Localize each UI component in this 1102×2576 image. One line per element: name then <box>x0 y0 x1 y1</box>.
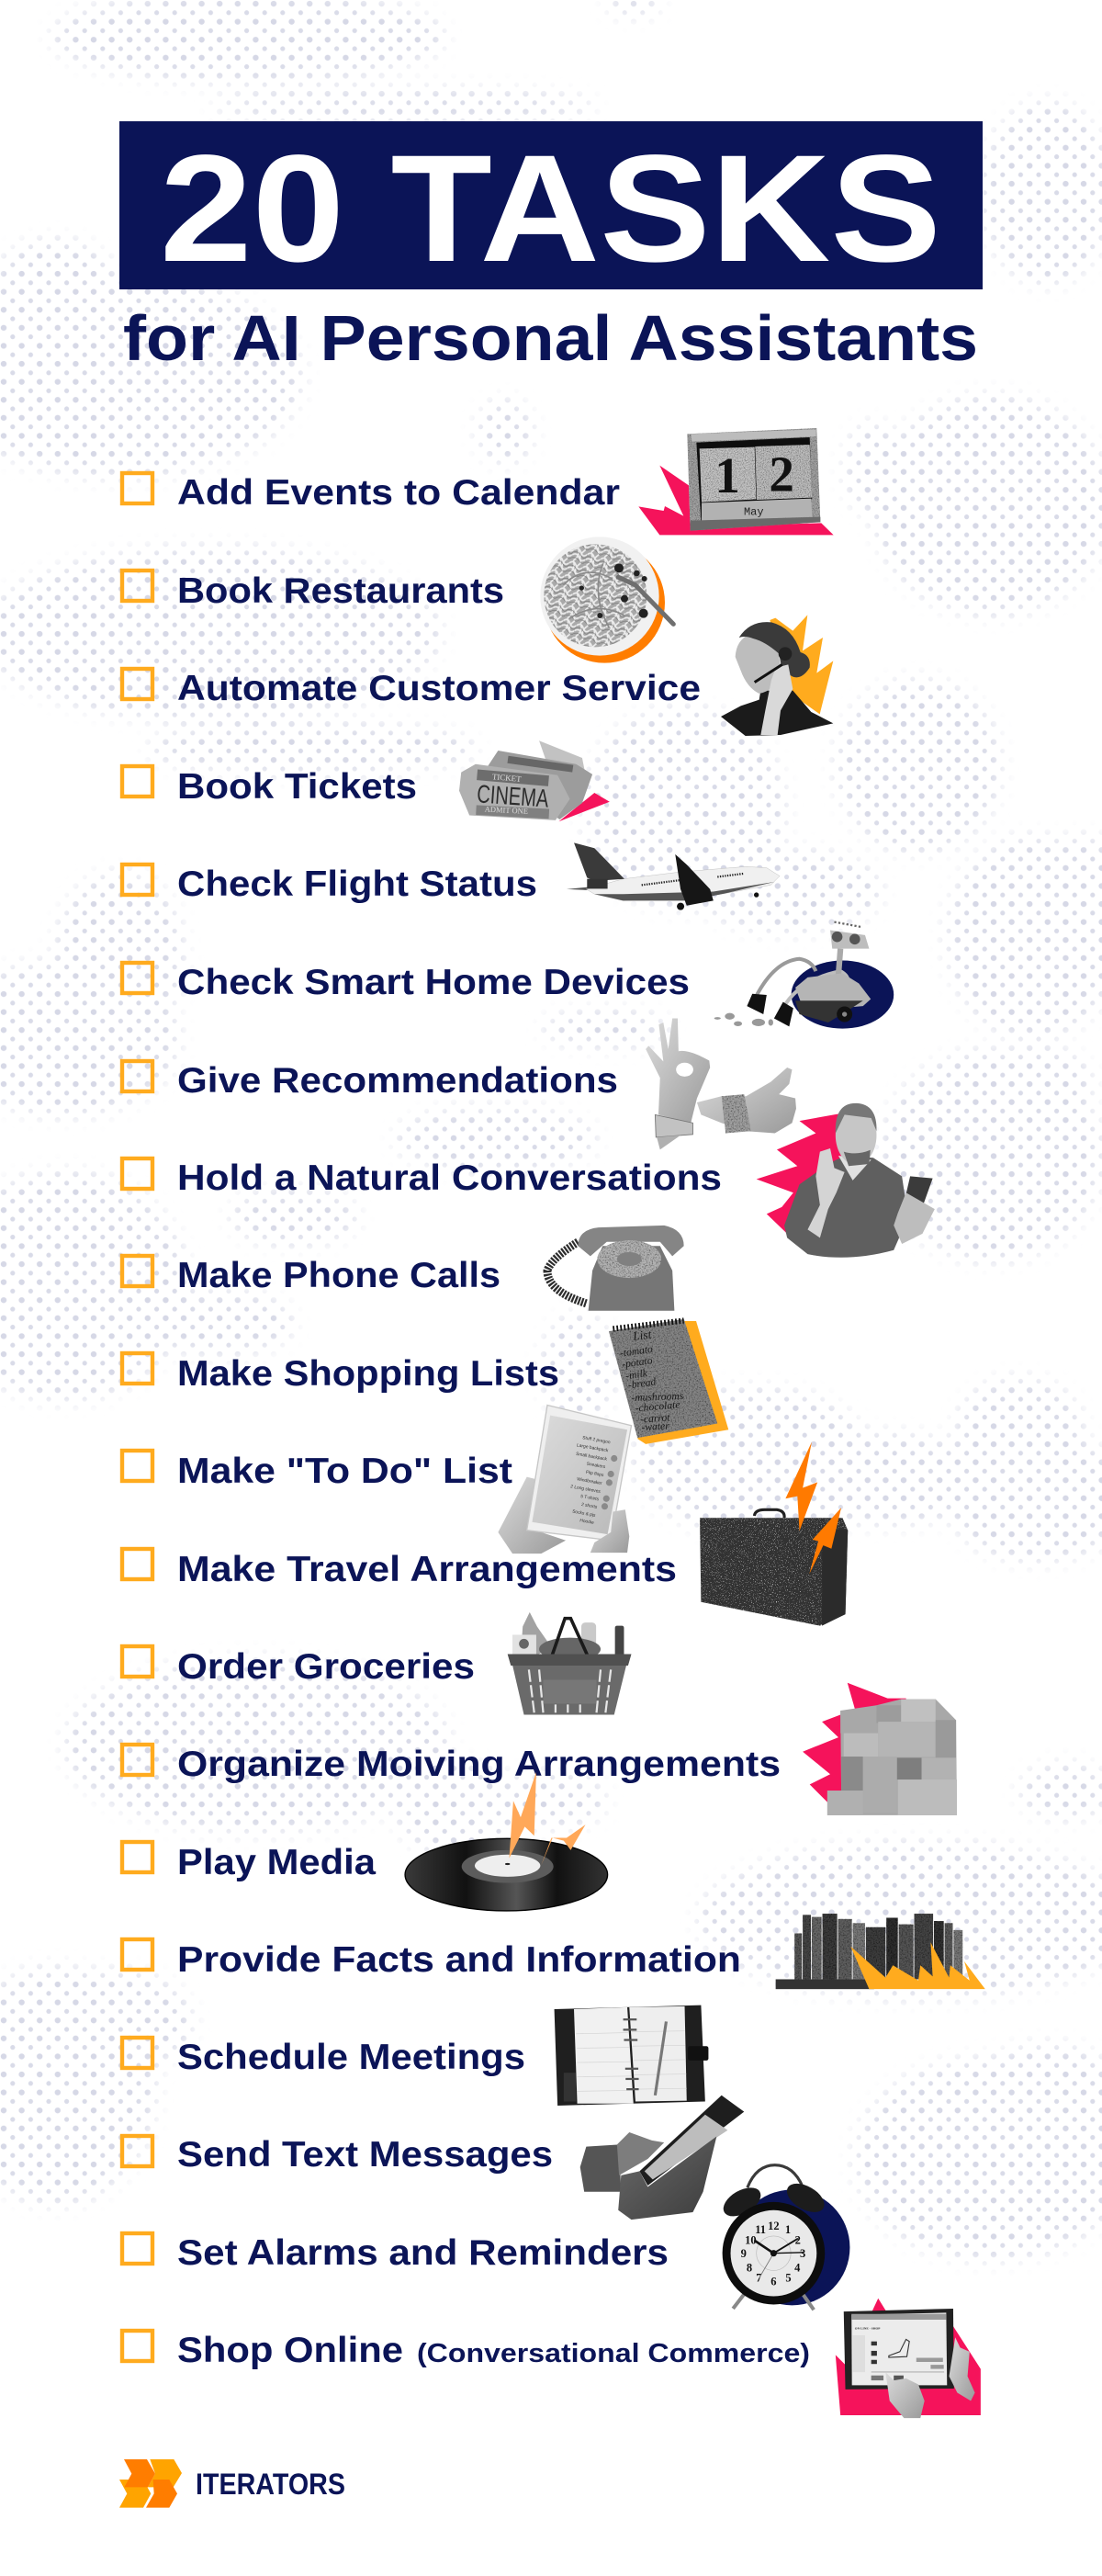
icon: alarm clock: 7 <box>756 2271 761 2284</box>
task: check flight status: Check Flight Status <box>177 864 537 904</box>
icon: old suitcase with lightning <box>700 1442 848 1626</box>
icon: tablet with to-do list: Small backpack <box>576 1452 608 1463</box>
task: book tickets: Book Tickets <box>177 767 417 807</box>
icon: tablet with to-do list: Flip flops <box>585 1470 604 1478</box>
icon: customer service woman <box>721 615 833 736</box>
icon: rotary telephone <box>547 1226 684 1311</box>
icon: grocery basket <box>508 1612 632 1715</box>
icon: tablet with to-do list: Large backpack <box>577 1442 609 1453</box>
icon: tablet with to-do list <box>498 1405 632 1554</box>
icon: wooden calendar: May <box>744 506 764 519</box>
icon: shopping list notepad: List <box>631 1328 652 1343</box>
icon: alarm clock: 1 <box>785 2223 791 2236</box>
task: shop online: Shop Online <box>177 2331 403 2370</box>
task: organize moiving arrangements: Organize Moiving Arrangements <box>177 1745 781 1784</box>
task: check smart home devices: Check Smart Home Devices <box>177 963 690 1002</box>
task: shop online <box>122 2331 810 2370</box>
icon: alarm clock: 8 <box>747 2261 752 2274</box>
icon: shopping list notepad: -chocolate <box>635 1398 680 1415</box>
icon: alarm clock: 5 <box>785 2271 792 2284</box>
task: make to do list: Make "To Do" List <box>177 1452 512 1491</box>
icon: cinema tickets <box>459 740 610 821</box>
icon: alarm clock: 10 <box>745 2233 757 2246</box>
icon: tablet with to-do list: Socks & pjs <box>572 1509 596 1519</box>
task: order groceries: Order Groceries <box>177 1647 475 1687</box>
icon: shopping list notepad: -bread <box>627 1375 657 1392</box>
icon: alarm clock <box>718 2165 849 2310</box>
icon: iterators chevrons <box>119 2459 182 2508</box>
icon: shopping list notepad: -water <box>641 1420 670 1433</box>
icon: pasta plate <box>540 537 673 663</box>
icon: shopping list notepad: -tomato <box>619 1343 654 1360</box>
task: send text messages: Send Text Messages <box>177 2135 553 2175</box>
icon: alarm clock: 9 <box>741 2247 747 2260</box>
logo wordmark: ITERATORS <box>196 2468 345 2501</box>
icon: tablet with to-do list: 5 T-shirts <box>580 1494 600 1503</box>
icon: open planner with pen <box>555 2005 708 2106</box>
icon: tablet with to-do list: Sneakers <box>586 1462 606 1470</box>
task: make phone calls: Make Phone Calls <box>177 1256 500 1295</box>
icon: cinema tickets: ADMIT ONE <box>485 804 528 816</box>
task: book restaurants: Book Restaurants <box>177 571 504 611</box>
icon: vacuum robot <box>714 922 894 1029</box>
icon: alarm clock: 6 <box>770 2276 777 2288</box>
task: set alarms and reminders: Set Alarms and Reminders <box>177 2233 669 2273</box>
icon: alarm clock: 4 <box>794 2261 801 2274</box>
icon: cinema tickets: TICKET <box>492 772 523 784</box>
icon: tablet with to-do list: 2 Long sleeves <box>570 1484 602 1495</box>
icon: wooden calendar: 1 <box>714 447 740 503</box>
icon: tablet with to-do list: Stuff 2 pregon <box>582 1435 611 1445</box>
icon: alarm clock: 2 <box>795 2233 801 2246</box>
task: provide facts and information: Provide Facts and Information <box>177 1940 741 1980</box>
icon: stacked moving boxes <box>803 1683 957 1815</box>
task: automate customer service: Automate Customer Service <box>177 669 701 708</box>
icon: wooden calendar <box>638 428 834 535</box>
icon: shopping list notepad: -milk <box>624 1367 649 1382</box>
task: hold a natural conversations: Hold a Natural Conversations <box>177 1158 722 1198</box>
task: give recommendations: Give Recommendations <box>177 1061 618 1101</box>
icon: airplane <box>567 842 780 910</box>
icon: man waving with phone <box>757 1103 935 1258</box>
logo: iterators <box>119 2459 345 2508</box>
task: add events to calendar: Add Events to Calendar <box>177 473 620 513</box>
task: shop online: (Conversational Commerce) <box>417 2339 810 2368</box>
subtitle: for AI Personal Assistants <box>123 302 978 374</box>
icon: bookshelf <box>776 1914 985 1989</box>
icon: shopping list notepad: -carrot <box>640 1411 671 1426</box>
title banner: 20 TASKS <box>160 124 941 294</box>
task: play media: Play Media <box>177 1843 376 1882</box>
task: schedule meetings: Schedule Meetings <box>177 2038 525 2077</box>
icon: wooden calendar: 2 <box>769 446 794 503</box>
icon: tablet with to-do list: Windbreaker <box>577 1476 602 1486</box>
icon: alarm clock: 12 <box>768 2220 780 2232</box>
icon: shopping list notepad <box>609 1319 728 1444</box>
icon: hands gesture <box>646 1018 796 1149</box>
task: make travel arrangements: Make Travel Arrangements <box>177 1550 677 1589</box>
icon: alarm clock: 3 <box>800 2247 805 2260</box>
icon: shopping list notepad: -potato <box>621 1354 653 1371</box>
icon: alarm clock: 11 <box>755 2223 766 2236</box>
icon: tablet with to-do list: Hoodie <box>579 1518 594 1526</box>
icon: hand texting on phone <box>580 2096 744 2220</box>
icon: online shop tablet <box>836 2299 981 2418</box>
icon: shopping list notepad: -mushrooms <box>631 1390 684 1404</box>
icon: online shop tablet: ON LINE - SHOP <box>855 2326 881 2330</box>
task list <box>122 473 810 2370</box>
icon: tablet with to-do list: 2 shorts <box>580 1502 598 1510</box>
icon: cinema tickets: CINEMA <box>476 779 550 813</box>
icon: vinyl record <box>405 1772 608 1911</box>
task: make shopping lists: Make Shopping Lists <box>177 1354 559 1394</box>
